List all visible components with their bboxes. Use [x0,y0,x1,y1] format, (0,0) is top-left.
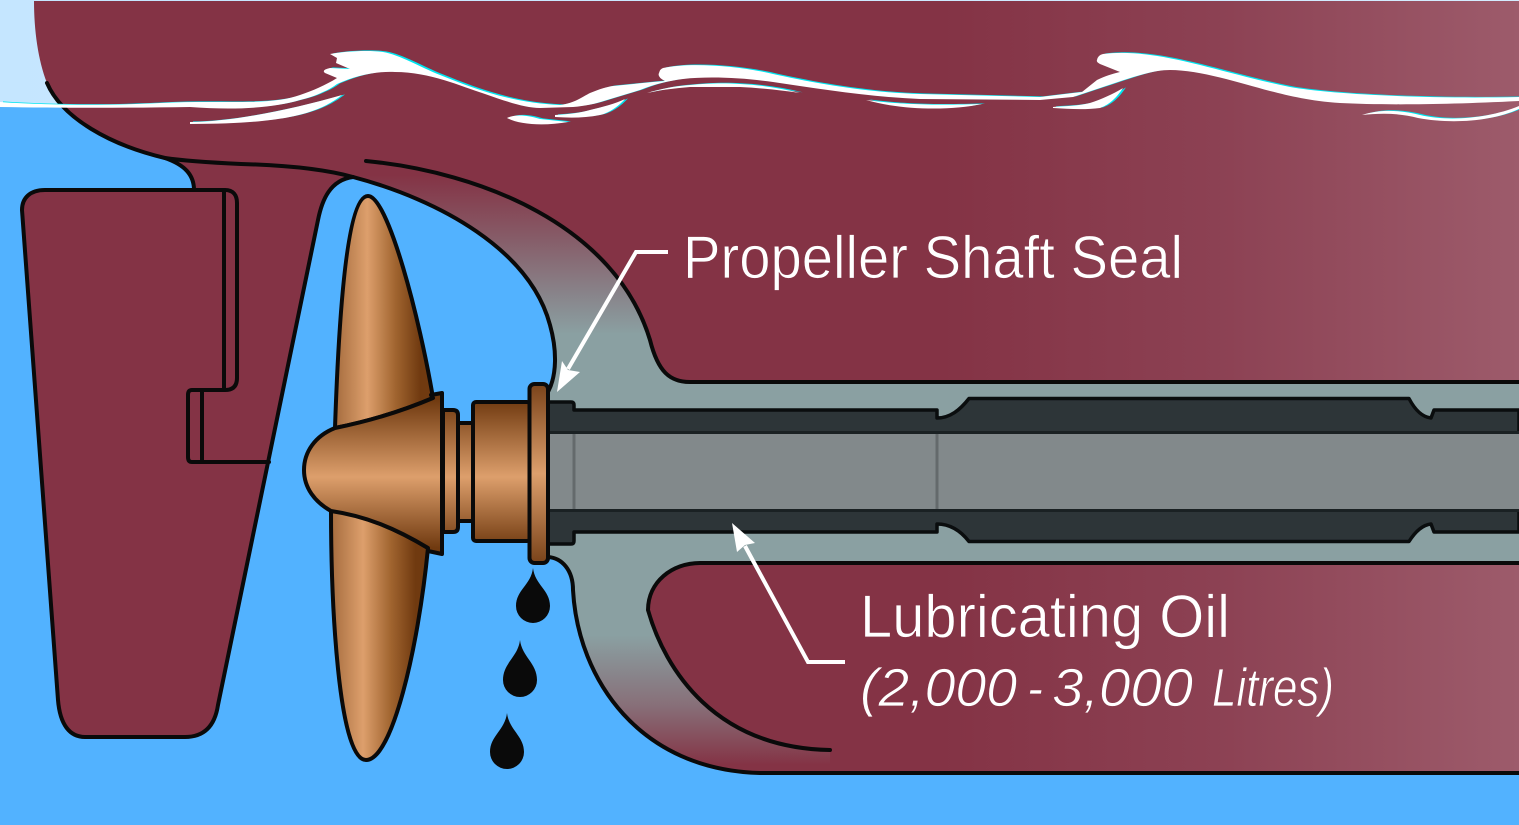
propeller [304,196,548,760]
shaft liner [548,398,1519,544]
label: lubricating oil: Lubricating Oil [860,583,1230,650]
wave cyan highlight [3,50,1519,124]
neck [458,423,473,521]
oil drop 3 [490,713,524,769]
label: oil volume: 3,000 [1052,658,1193,718]
shaft joint lines [574,434,937,509]
sky [0,0,1519,105]
lubricating oil chamber [353,161,1519,773]
flange [530,384,548,563]
wave white foam [0,51,1519,124]
label: oil volume [860,658,1334,718]
label: oil volume: Litres) [1212,658,1334,718]
collar [443,410,458,532]
shaft core [548,433,1519,510]
arrow: to lubricating oil [732,523,845,662]
upper blade [335,196,433,428]
propeller shaft [548,398,1519,544]
oil drop 1 [516,568,550,623]
lower blade [331,510,428,760]
label: oil volume: - [1027,658,1043,718]
oil drop 2 [503,640,537,697]
label: oil volume: (2,000 [860,658,1017,718]
arrow: to propeller shaft seal [557,252,668,392]
waves [0,50,1519,124]
boss [473,402,530,541]
hub [304,393,442,554]
shaft edge lines [548,432,1519,510]
label: propeller shaft seal: Propeller Shaft Seal [683,224,1183,291]
